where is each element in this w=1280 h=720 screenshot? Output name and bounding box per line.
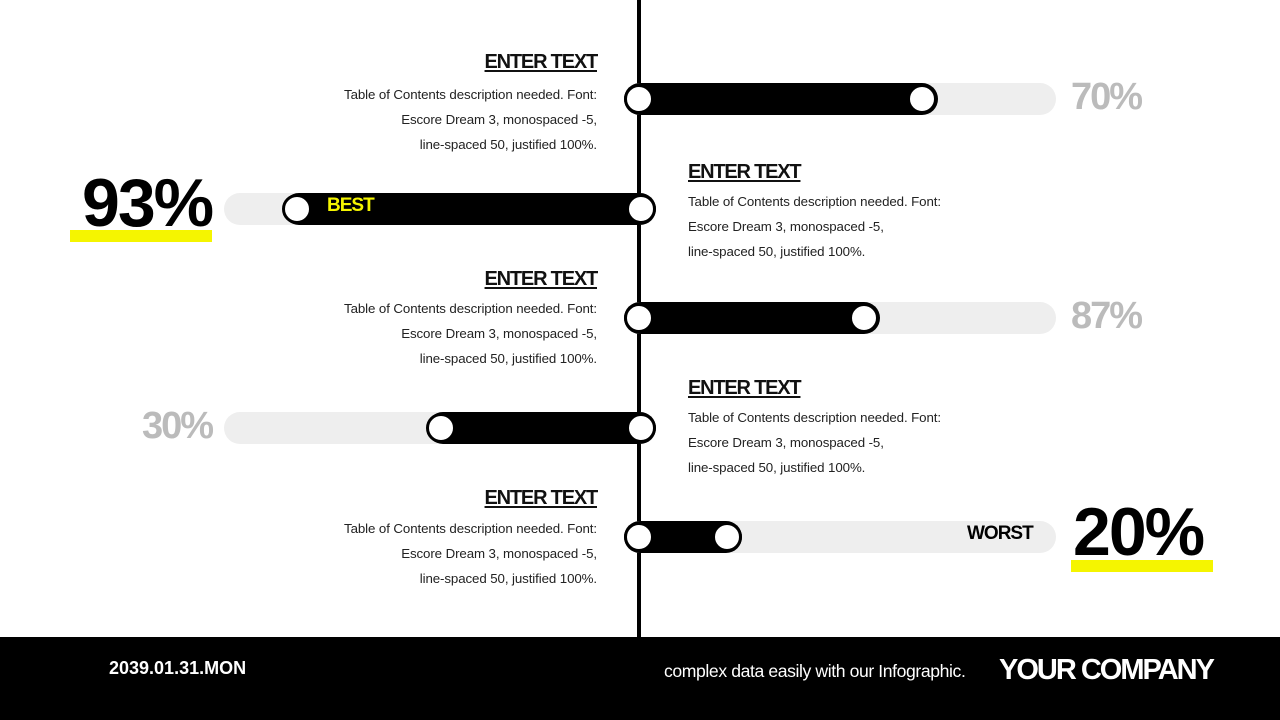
- bar fill: [427, 412, 656, 444]
- bar fill: [624, 302, 880, 334]
- description left 3: line-spaced 50, justified 100%.: [420, 351, 597, 366]
- description left 5: [344, 521, 597, 586]
- row 3: bar 87%: [344, 268, 1142, 366]
- heading right 4: ENTER TEXT: [688, 377, 800, 399]
- description left 1: Table of Contents description needed. Font:: [344, 87, 597, 102]
- row 2: bar 93% best: [70, 161, 941, 259]
- row 4: bar 30%: [142, 377, 941, 475]
- description right 2: Table of Contents description needed. Font:: [688, 194, 941, 209]
- description left 5: Escore Dream 3, monospaced -5,: [401, 546, 597, 561]
- description right 4: [688, 410, 941, 475]
- description right 4: line-spaced 50, justified 100%.: [688, 460, 865, 475]
- heading left 3: ENTER TEXT: [485, 268, 597, 290]
- value 30%: 30%: [142, 405, 212, 447]
- description right 2: line-spaced 50, justified 100%.: [688, 244, 865, 259]
- footer date: 2039.01.31.MON: [109, 658, 246, 678]
- bar fill: [624, 83, 938, 115]
- description left 5: line-spaced 50, justified 100%.: [420, 571, 597, 586]
- description left 3: [344, 301, 597, 366]
- bar fill: [624, 521, 742, 553]
- value 70%: 70%: [1071, 76, 1141, 118]
- bar fill: [283, 193, 656, 225]
- description left 1: line-spaced 50, justified 100%.: [420, 137, 597, 152]
- bar track: [624, 83, 1056, 115]
- heading left 5: ENTER TEXT: [485, 487, 597, 509]
- description right 2: Escore Dream 3, monospaced -5,: [688, 219, 884, 234]
- footer: [0, 637, 1280, 720]
- bar track: [224, 193, 656, 225]
- description left 1: [344, 87, 597, 152]
- heading left 1: ENTER TEXT: [485, 51, 597, 73]
- bar track: [224, 412, 656, 444]
- description left 1: Escore Dream 3, monospaced -5,: [401, 112, 597, 127]
- description right 2: [688, 194, 941, 259]
- value 87%: 87%: [1071, 295, 1141, 337]
- label WORST: WORST: [967, 523, 1033, 544]
- description right 4: Table of Contents description needed. Font:: [688, 410, 941, 425]
- value 20% with underline: 20%: [1073, 494, 1203, 570]
- bar track: [624, 521, 1056, 553]
- description left 3: Table of Contents description needed. Font:: [344, 301, 597, 316]
- footer company name: YOUR COMPANY: [999, 654, 1213, 686]
- vertical axis line: [637, 0, 641, 637]
- row 1: bar 70%: [344, 51, 1142, 152]
- row 5: bar 20% worst: [344, 487, 1213, 586]
- label BEST: BEST: [327, 195, 374, 216]
- description left 3: Escore Dream 3, monospaced -5,: [401, 326, 597, 341]
- description right 4: Escore Dream 3, monospaced -5,: [688, 435, 884, 450]
- footer tagline: complex data easily with our Infographic.: [664, 661, 965, 681]
- description left 5: Table of Contents description needed. Font:: [344, 521, 597, 536]
- value 93% with underline: 93%: [82, 165, 212, 241]
- heading right 2: ENTER TEXT: [688, 161, 800, 183]
- bar track: [624, 302, 1056, 334]
